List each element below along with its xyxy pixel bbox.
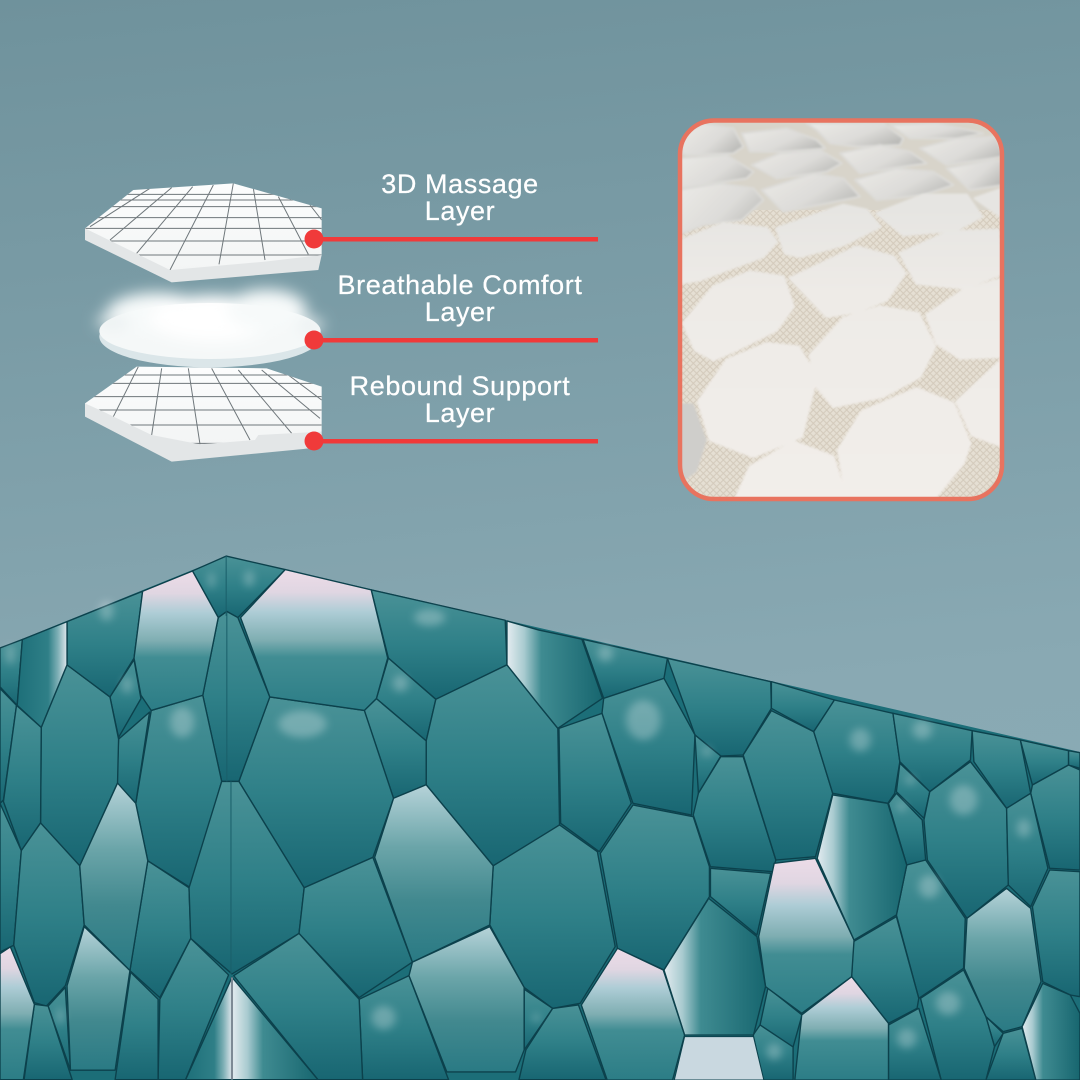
callout line: breathable comfort layer [304,330,598,350]
panel: fabric close-up photo [670,110,1015,510]
icon: 3D massage layer plate [70,183,323,282]
label: 3D massage layer: 3D Massage [381,169,539,199]
label: breathable comfort layer: Layer [425,297,495,327]
label: breathable comfort layer [338,270,582,327]
mosaic: teal hexagon foam texture [0,556,1080,1080]
callout line: 3D massage layer [304,230,598,248]
label: breathable comfort layer: Breathable Comfort [338,270,582,300]
label: rebound support layer: Rebound Support [350,371,570,401]
icon: rebound support layer plate [70,367,323,462]
label: 3D massage layer [381,169,539,226]
icon: breathable comfort layer cloud [97,289,323,367]
mosaic: right half cells [559,639,1080,1080]
mosaic: left half cells [0,556,615,1080]
label: rebound support layer [350,371,570,428]
callout line: rebound support layer [304,432,598,450]
label: 3D massage layer: Layer [425,196,495,226]
label: rebound support layer: Layer [425,398,495,428]
